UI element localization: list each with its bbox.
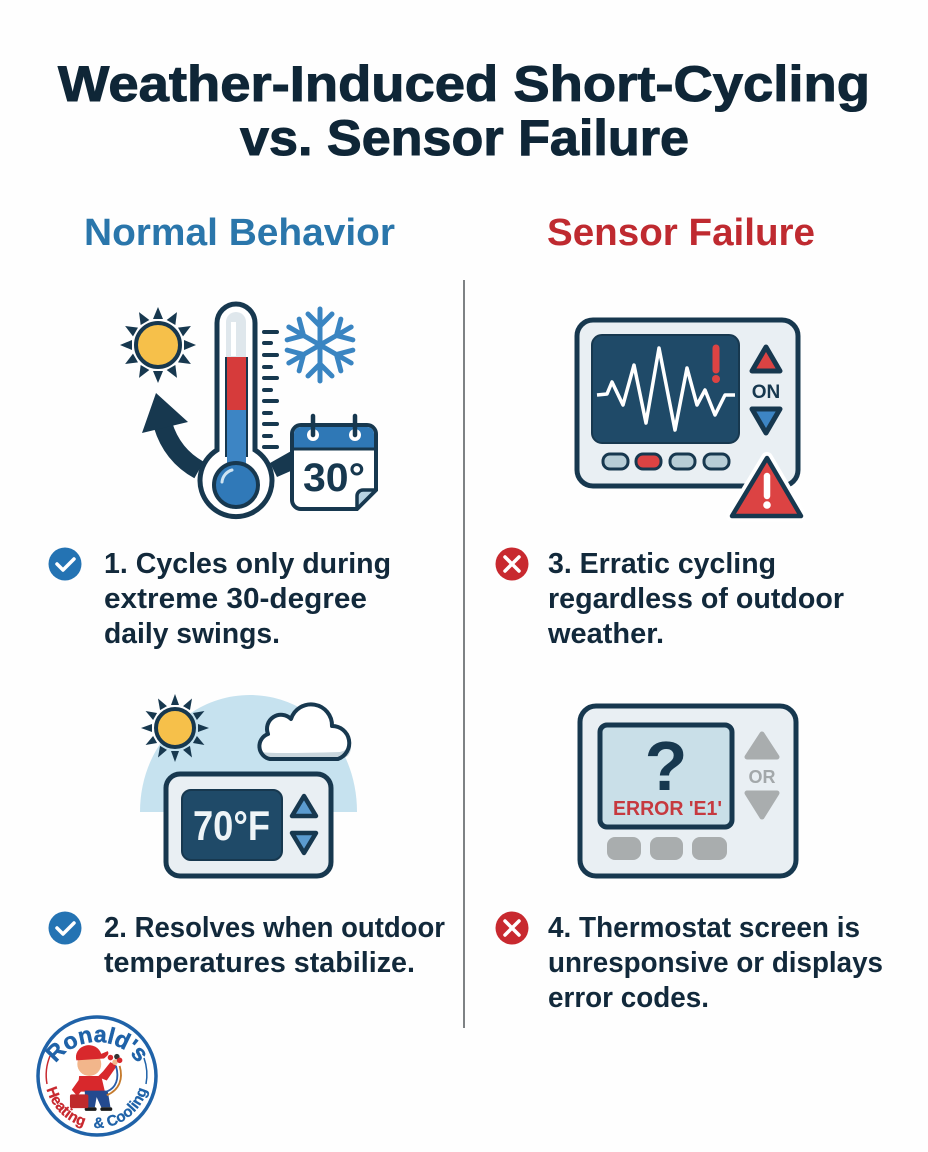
- title: Weather-Induced Short-Cycling: [58, 56, 870, 112]
- thermometer scale: [264, 332, 277, 447]
- icon: snowflake: [283, 309, 357, 381]
- icon: x badge 1: [496, 548, 528, 580]
- title: vs. Sensor Failure: [240, 110, 689, 166]
- text: item 4: [548, 912, 883, 1014]
- heading: normal behavior: Normal Behavior: [84, 212, 395, 254]
- icon: check badge 1: [48, 548, 82, 580]
- heading: sensor failure: Sensor Failure: [547, 212, 815, 254]
- icon: sky and cloud backdrop: [140, 695, 357, 812]
- icon: error thermostat: ?: [645, 727, 687, 805]
- icon: thermometer: [200, 304, 272, 517]
- text: item 3: weather.: [547, 618, 664, 650]
- icon: check badge 2: [48, 912, 82, 944]
- icon: erratic thermostat: ON: [752, 382, 780, 403]
- icon: curved arrow: [142, 393, 293, 477]
- text: item 2: temperatures stabilize.: [104, 947, 415, 979]
- text: item 1: [104, 548, 391, 650]
- title: [58, 56, 870, 166]
- icon: small sun: [141, 694, 209, 762]
- text: item 1: 1. Cycles only during: [104, 548, 391, 580]
- icon: warning triangle: [732, 458, 801, 516]
- text: item 2: [104, 912, 445, 979]
- text: item 4: error codes.: [548, 982, 709, 1014]
- logo: Ronald's Heating and Cooling: & Cooling: [94, 1088, 150, 1128]
- logo: Ronald's Heating and Cooling: Ronald's: [45, 1026, 146, 1062]
- text: item 4: unresponsive or displays: [548, 947, 883, 979]
- logo: Ronald's Heating and Cooling: [36, 1015, 158, 1137]
- text: item 3: 3. Erratic cycling: [548, 548, 776, 580]
- text: item 1: extreme 30-degree: [104, 583, 367, 615]
- icon: error thermostat: OR: [748, 767, 776, 787]
- icon: sun: [120, 307, 196, 383]
- text: item 1: daily swings.: [104, 618, 280, 650]
- mascot: [70, 1045, 122, 1111]
- text: item 3: regardless of outdoor: [548, 583, 844, 615]
- icon: thermostat 70F: [166, 774, 331, 876]
- icon: error thermostat: ERROR 'E1': [613, 798, 722, 820]
- icon: error thermostat: [580, 706, 796, 876]
- logo: Ronald's Heating and Cooling: Heating: [46, 1086, 86, 1128]
- icon: calendar: [292, 416, 376, 509]
- icon: thermostat 70F: 70°F: [193, 802, 270, 849]
- icon: calendar: 30°: [303, 456, 365, 500]
- text: item 2: 2. Resolves when outdoor: [104, 912, 445, 944]
- text: item 4: 4. Thermostat screen is: [548, 912, 860, 944]
- icon: erratic thermostat: [577, 320, 798, 486]
- icon: x badge 2: [496, 912, 528, 944]
- text: item 3: [547, 548, 844, 650]
